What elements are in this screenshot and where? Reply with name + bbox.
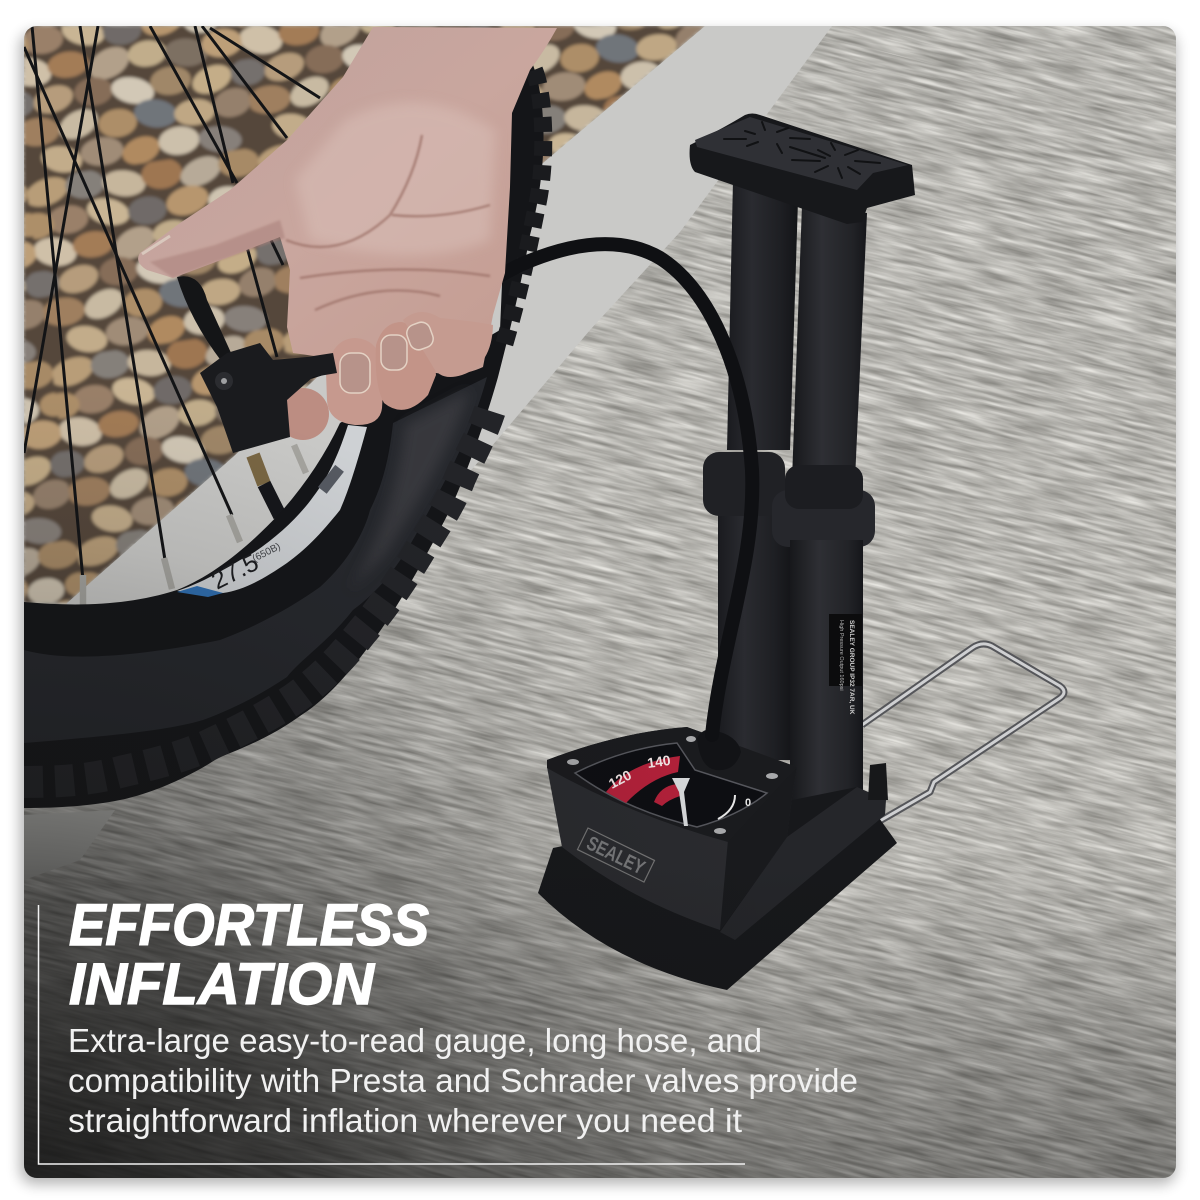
warning label: High Pressure Output 160psi [838,620,844,691]
gauge housing: 0 [745,797,751,809]
folding foot wire [862,644,1064,822]
small lower kerb patch [24,810,115,880]
base top plate [720,787,886,940]
base [538,787,897,990]
lower thumb tip [277,388,329,440]
gauge housing [547,727,797,930]
rim band [177,425,367,593]
lower tread knobs [24,410,490,782]
valve stem [253,455,280,516]
front upper tube [792,205,867,480]
spokes [24,26,320,580]
dark bottom gradient [24,860,1176,1178]
screws [567,736,778,834]
fingernails [340,320,436,393]
description [68,1023,858,1140]
finger two [376,322,436,410]
description: straightforward inflation wherever you need it [68,1103,743,1140]
finger three [403,312,493,377]
pressure numbers: 140 [646,752,672,771]
heading [69,893,429,1017]
thumb nail edge [142,236,170,254]
description: Extra-large easy-to-read gauge, long hose, and [68,1023,762,1060]
spoke nipples [83,445,306,606]
right scale [718,795,735,819]
rim size label: (650B) [251,541,282,565]
front lower tube [790,540,863,800]
lever [177,276,232,362]
finger one [326,338,384,425]
rim blue stripe [177,586,223,597]
tyre body [24,62,544,808]
thumb shading [150,220,285,278]
needle [672,778,690,826]
handle grip pattern [724,122,880,178]
pump hose [310,244,752,735]
palm crease [286,135,490,310]
rear upper tube [727,180,798,450]
rim size label [212,543,280,590]
red zone [654,784,680,806]
smooth concrete kerb [60,26,832,640]
head pivot [215,372,233,390]
warning label: SEALEY GROUP IP32 7AR, UK [848,620,855,715]
sidewall highlight [364,396,465,570]
handle [690,114,915,224]
brand badge: SEALEY [583,832,649,880]
pump [538,114,1064,990]
pump head [177,276,337,453]
rim brand logo [318,465,344,494]
caption frame [38,905,745,1164]
warning label [829,614,862,715]
hose connector [697,730,741,770]
heading: INFLATION [69,952,375,1017]
brand badge [577,828,655,882]
front collar [772,465,875,547]
rim size label: 27.5 [207,548,263,595]
rear collar [703,452,785,516]
upper tread knobs [504,70,543,345]
gravel bed [24,26,705,603]
clip post [868,763,888,800]
bicycle wheel [24,26,544,808]
head body [200,343,337,453]
description: compatibility with Presta and Schrader valves provide [68,1063,858,1100]
caption text [68,893,858,1140]
heading: EFFORTLESS [69,893,429,958]
tyre sidewall [24,377,487,743]
thumb and palm [138,27,557,374]
palm highlight [295,102,495,255]
hand [138,27,557,440]
rear lower tube [718,500,793,760]
pressure arc red [606,756,680,803]
gauge window [575,743,767,827]
pressure numbers: 120 [606,766,634,792]
pressure numbers [609,756,670,789]
